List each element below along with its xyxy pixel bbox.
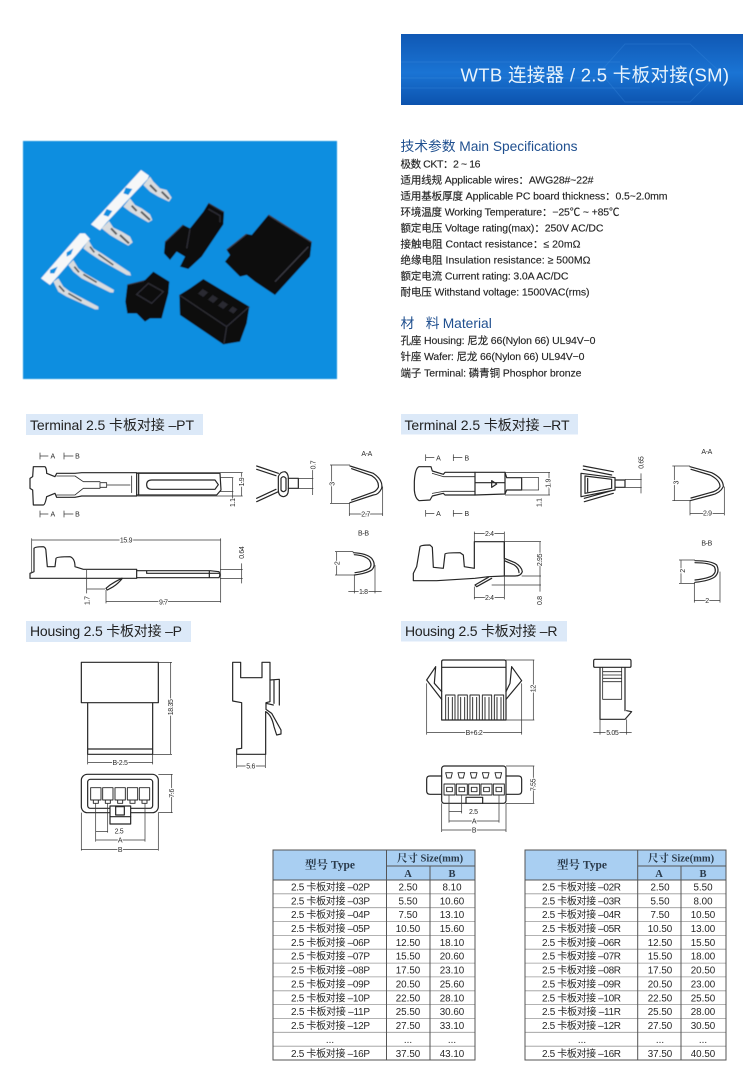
table rows: ... xyxy=(404,1035,412,1046)
terminal strips xyxy=(41,170,172,309)
table rows: ... xyxy=(448,1035,456,1046)
table rows: 2.5 卡板对接 –07P xyxy=(291,950,370,963)
heading: main specifications: 技术参数 Main Specifications xyxy=(400,138,578,154)
section B-B: 1.8 xyxy=(359,589,368,596)
section markers: A xyxy=(51,454,56,461)
table rows: 18.10 xyxy=(440,938,465,949)
table rows: 7.50 xyxy=(650,910,670,921)
side view: 1.7 xyxy=(84,596,91,605)
spec lines: 耐电压 Withstand voltage: 1500VAC(rms) xyxy=(400,286,590,298)
table rows: 17.50 xyxy=(396,966,421,977)
section markers xyxy=(40,453,80,519)
table header xyxy=(525,850,726,880)
section markers: B xyxy=(75,454,80,461)
table rows xyxy=(542,880,716,1060)
table rows: 2.5 卡板对接 –08P xyxy=(291,964,370,977)
drawing: terminal RT xyxy=(413,449,724,605)
section B-B: B-B xyxy=(701,541,713,548)
table rows: 15.60 xyxy=(440,924,465,935)
table rows: 8.00 xyxy=(693,896,713,907)
side view: 2.4 xyxy=(485,531,494,538)
heading: material: 材 xyxy=(400,316,414,331)
table rows: 27.50 xyxy=(396,1021,421,1032)
spec lines: 绝缘电阻 Insulation resistance: ≥ 500MΩ xyxy=(400,254,591,266)
table rows: 27.50 xyxy=(648,1021,673,1032)
title text: WTB 连接器 / 2.5 卡板对接(SM) xyxy=(460,64,729,86)
table rows: 12.50 xyxy=(648,938,673,949)
table rows: 37.50 xyxy=(396,1049,421,1060)
top view xyxy=(30,467,246,507)
table rows: 2.5 卡板对接 –10P xyxy=(291,991,370,1004)
table rows: 20.50 xyxy=(648,980,673,990)
heading: housing R: Housing 2.5 卡板对接 –R xyxy=(405,623,558,639)
section A-A xyxy=(672,449,724,518)
front view: 12 xyxy=(531,685,538,692)
bottom view: A xyxy=(118,838,123,845)
table rows: 10.60 xyxy=(440,896,465,907)
table header: 型号 Type xyxy=(305,858,355,872)
table header: A xyxy=(655,869,663,880)
table rows: 33.10 xyxy=(440,1021,465,1032)
table rows: 20.50 xyxy=(691,966,716,977)
title banner xyxy=(401,34,743,105)
table rows: 13.00 xyxy=(691,924,716,935)
table rows: 2.5 卡板对接 –09P xyxy=(291,978,370,990)
table rows: 25.50 xyxy=(691,993,716,1004)
front view xyxy=(257,460,317,502)
table rows: 5.50 xyxy=(398,896,418,907)
table rows: 40.50 xyxy=(691,1049,716,1060)
top view: 1.1 xyxy=(536,498,543,507)
material lines xyxy=(400,334,596,380)
table rows: 2.5 卡板对接 –12P xyxy=(291,1019,370,1032)
table rows: 30.50 xyxy=(691,1021,716,1032)
bottom view: B xyxy=(118,847,123,854)
spec lines: 额定电压 Voltage rating(max)：250V AC/DC xyxy=(400,222,604,234)
table rows: 17.50 xyxy=(648,966,673,977)
table rows: 43.10 xyxy=(440,1049,465,1060)
table: P series sizes xyxy=(273,850,475,1060)
section B-B: B-B xyxy=(358,531,369,538)
table rows: 2.5 卡板对接 –05R xyxy=(542,922,621,935)
table rows: 10.50 xyxy=(648,924,673,935)
table rows: 2.5 卡板对接 –08R xyxy=(542,964,621,977)
table rows: ... xyxy=(326,1035,334,1046)
drawing: terminal PT xyxy=(30,451,383,606)
table rows: 7.50 xyxy=(398,910,418,921)
housing: bottom middle xyxy=(179,279,249,344)
table borders xyxy=(525,850,726,1060)
side view: 9.7 xyxy=(159,599,168,606)
section markers: B xyxy=(465,455,470,462)
table rows: 2.5 卡板对接 –04P xyxy=(291,908,370,921)
bottom view: 7.6 xyxy=(169,789,176,798)
table rows: 28.00 xyxy=(691,1007,716,1018)
table rows: 13.10 xyxy=(440,910,465,921)
top view: 1.9 xyxy=(545,479,552,488)
bottom view: A xyxy=(472,818,477,825)
side view xyxy=(593,659,632,737)
bottom view: B xyxy=(472,828,477,835)
table header: 尺寸 Size(mm) xyxy=(648,852,715,864)
side view xyxy=(413,531,544,605)
table rows: 15.50 xyxy=(691,938,716,949)
section markers: B xyxy=(465,511,470,518)
table rows: 2.5 卡板对接 –03P xyxy=(291,894,370,907)
heading: material: 料 xyxy=(426,316,440,331)
section A-A: A-A xyxy=(361,451,373,458)
table rows: 20.50 xyxy=(396,980,421,990)
section A-A: 3 xyxy=(329,482,336,486)
side view: 5.05 xyxy=(606,730,619,737)
spec lines: 极数 CKT：2 ~ 16 xyxy=(400,158,481,170)
table rows: 22.50 xyxy=(396,993,421,1004)
material lines: 孔座 Housing: 尼龙 66(Nylon 66) UL94V−0 xyxy=(400,334,596,347)
table rows: 37.50 xyxy=(648,1049,673,1060)
material lines: 端子 Terminal: 磷青铜 Phosphor bronze xyxy=(400,366,582,380)
table header: B xyxy=(699,869,707,880)
heading: terminal PT: Terminal 2.5 卡板对接 –PT xyxy=(30,417,194,433)
front view xyxy=(427,660,538,737)
table rows xyxy=(291,880,465,1060)
drawing: housing R xyxy=(427,659,632,835)
side view: 15.9 xyxy=(120,538,133,545)
front view: 0.65 xyxy=(638,456,645,469)
housing: bottom left xyxy=(125,272,169,322)
table header: A xyxy=(404,869,412,880)
product photo xyxy=(23,141,337,379)
table rows: 2.5 卡板对接 –11P xyxy=(291,1005,370,1018)
table rows: 2.50 xyxy=(398,882,418,893)
section B-B: 2 xyxy=(705,598,709,605)
table rows: 2.50 xyxy=(650,882,670,893)
side view: 5.6 xyxy=(246,763,255,770)
top view xyxy=(414,467,552,507)
front view: 18.35 xyxy=(168,699,175,715)
side view: 2.95 xyxy=(537,553,544,566)
front view: B-2.5 xyxy=(112,760,128,767)
section B-B: 2 xyxy=(680,569,687,573)
table rows: 10.50 xyxy=(396,924,421,935)
table rows: 2.5 卡板对接 –11R xyxy=(542,1005,621,1018)
table header: B xyxy=(448,869,456,880)
spec lines: 适用线规 Applicable wires：AWG28#~22# xyxy=(400,174,594,186)
table rows: 5.50 xyxy=(650,896,670,907)
section A-A xyxy=(329,451,383,518)
table rows: 18.00 xyxy=(691,952,716,963)
table rows: 12.50 xyxy=(396,938,421,949)
material lines: 针座 Wafer: 尼龙 66(Nylon 66) UL94V−0 xyxy=(400,350,585,363)
table rows: 22.50 xyxy=(648,993,673,1004)
table rows: ... xyxy=(656,1035,664,1046)
table rows: 2.5 卡板对接 –16R xyxy=(542,1047,621,1060)
bottom view xyxy=(81,774,176,854)
bottom view xyxy=(427,766,538,835)
table rows: 2.5 卡板对接 –02P xyxy=(291,880,370,893)
table rows: 2.5 卡板对接 –05P xyxy=(291,922,370,935)
table rows: 2.5 卡板对接 –02R xyxy=(542,880,621,893)
table rows: 23.00 xyxy=(691,980,716,990)
front view xyxy=(81,662,175,767)
housing: top right xyxy=(225,215,312,295)
table rows: 2.5 卡板对接 –03R xyxy=(542,894,621,907)
table rows: 2.5 卡板对接 –04R xyxy=(542,908,621,921)
bottom view: 2.5 xyxy=(469,809,478,816)
lower strip xyxy=(41,233,131,309)
heading: material xyxy=(400,316,492,331)
table rows: 25.60 xyxy=(440,980,465,990)
table rows: 8.10 xyxy=(442,882,462,893)
black housings xyxy=(125,203,312,344)
table rows: 25.50 xyxy=(648,1007,673,1018)
table header: 尺寸 Size(mm) xyxy=(397,852,464,864)
drawing: housing P xyxy=(81,662,281,854)
heading: housing P: Housing 2.5 卡板对接 –P xyxy=(30,623,182,639)
table rows: 2.5 卡板对接 –16P xyxy=(291,1047,370,1060)
section A-A: A-A xyxy=(701,449,713,456)
heading: terminal RT: Terminal 2.5 卡板对接 –RT xyxy=(404,417,570,433)
front view xyxy=(581,456,645,502)
section A-A: 2.7 xyxy=(361,511,370,518)
section A-A: 3 xyxy=(674,480,681,484)
table rows: 2.5 卡板对接 –09R xyxy=(542,978,621,990)
bottom view: 7.55 xyxy=(531,778,538,791)
section markers xyxy=(426,454,470,518)
spec lines: 额定电流 Current rating: 3.0A AC/DC xyxy=(400,270,569,282)
section B-B: 2 xyxy=(334,561,341,565)
table grid xyxy=(273,894,475,1046)
section markers: A xyxy=(51,512,56,519)
table rows: 10.50 xyxy=(691,910,716,921)
side view: 0.64 xyxy=(239,546,246,559)
table rows: 28.10 xyxy=(440,993,465,1004)
table rows: 15.50 xyxy=(396,952,421,963)
table: R series sizes xyxy=(525,850,726,1060)
spec lines xyxy=(400,158,668,298)
section A-A: 2.9 xyxy=(703,511,712,518)
side view xyxy=(30,538,246,606)
spec lines: 接触电阻 Contact resistance：≤ 20mΩ xyxy=(400,238,581,250)
table rows: ... xyxy=(578,1035,586,1046)
bottom view: 2.5 xyxy=(115,829,124,836)
housing: top centre xyxy=(164,203,224,269)
table rows: 23.10 xyxy=(440,966,465,977)
upper strip xyxy=(91,170,172,246)
top view: 1.1 xyxy=(230,498,237,507)
section B-B xyxy=(334,531,382,596)
section markers: A xyxy=(436,511,441,518)
table rows: 5.50 xyxy=(693,882,713,893)
panel: material xyxy=(400,316,596,380)
heading: material: Material xyxy=(443,316,492,331)
front view: 0.7 xyxy=(310,460,317,469)
spec lines: 适用基板厚度 Applicable PC board thickness：0.5~2.0mm xyxy=(400,190,668,202)
table grid xyxy=(525,894,726,1046)
table rows: 2.5 卡板对接 –12R xyxy=(542,1019,621,1032)
table rows: 30.60 xyxy=(440,1007,465,1018)
side view: 0.8 xyxy=(537,596,544,605)
front view: B+6.2 xyxy=(466,730,483,737)
section markers: A xyxy=(436,455,441,462)
table rows: 2.5 卡板对接 –06R xyxy=(542,936,621,949)
table rows: 20.60 xyxy=(440,952,465,963)
spec lines: 环境温度 Working Temperature：−25℃ ~ +85℃ xyxy=(400,206,620,218)
panel: main specifications xyxy=(400,138,668,298)
table rows: ... xyxy=(699,1035,707,1046)
table rows: 2.5 卡板对接 –06P xyxy=(291,936,370,949)
table header: 型号 Type xyxy=(557,858,607,872)
table header xyxy=(273,850,475,880)
table borders xyxy=(273,850,475,1060)
side view xyxy=(233,662,281,770)
table rows: 25.50 xyxy=(396,1007,421,1018)
section B-B xyxy=(679,541,720,605)
section markers: B xyxy=(75,512,80,519)
table rows: 2.5 卡板对接 –10R xyxy=(542,991,621,1004)
table rows: 2.5 卡板对接 –07R xyxy=(542,950,621,963)
top view: 1.9 xyxy=(239,477,246,486)
table rows: 15.50 xyxy=(648,952,673,963)
side view: 2.4 xyxy=(485,595,494,602)
